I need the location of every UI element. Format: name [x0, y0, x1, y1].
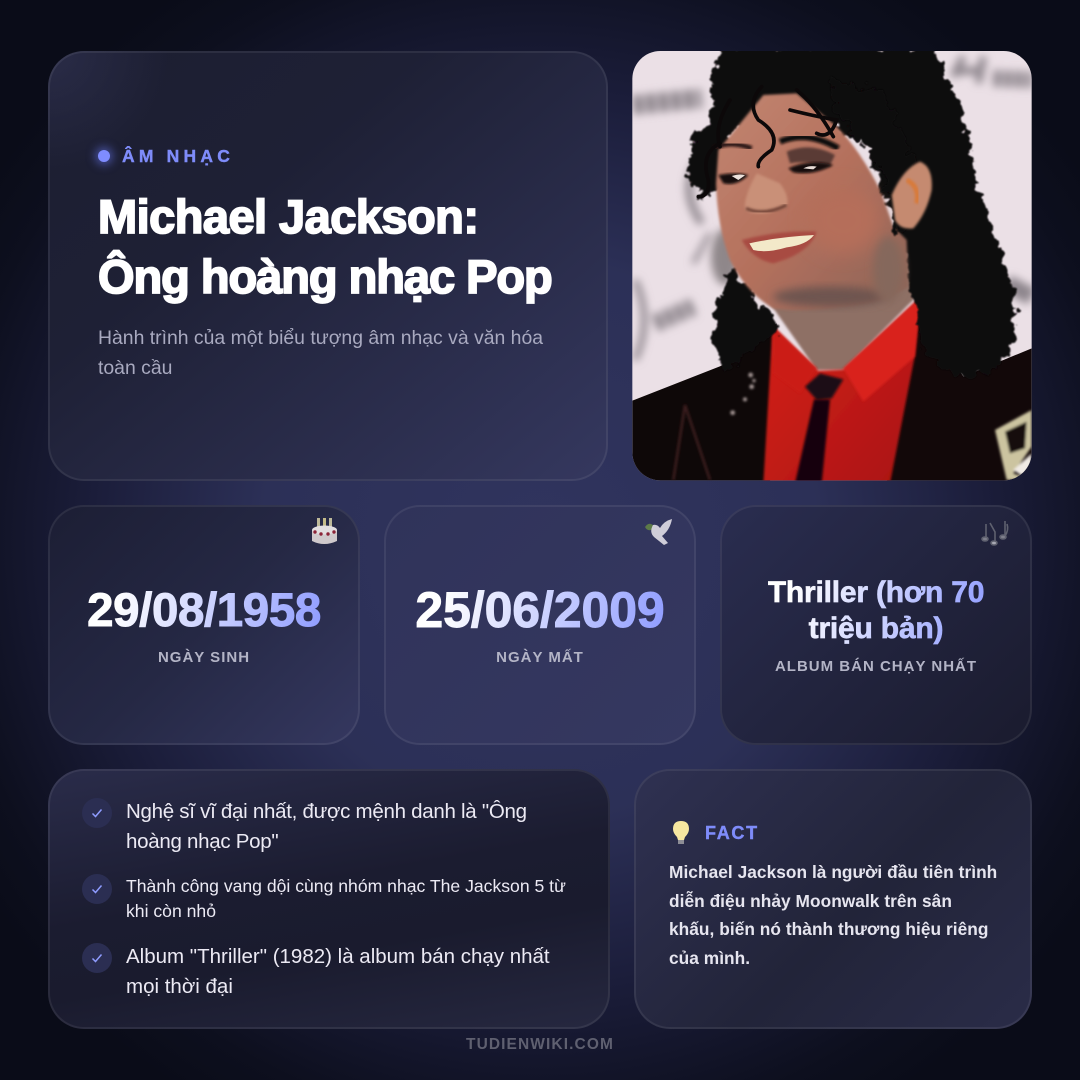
icon: birthday cake — [312, 518, 337, 544]
text: Album "Thriller" (1982) là album bán chạy nhất — [126, 945, 550, 968]
key point 3 — [82, 943, 550, 998]
stat: best-selling album: Thriller (hơn 70 — [768, 576, 984, 609]
icon: music notes — [981, 521, 1008, 546]
grey shadow near jaw — [711, 228, 739, 285]
stat: birth date: 29/08/1958 — [87, 584, 321, 637]
text: Nghệ sĩ vĩ đại nhất, được mệnh danh là "Ông — [126, 800, 527, 823]
fact text — [669, 862, 997, 968]
hair — [687, 47, 1015, 378]
stat: death date: 25/06/2009 — [415, 582, 665, 638]
text: khi còn nhỏ — [126, 901, 216, 921]
stat: best-selling album — [768, 576, 984, 645]
text — [126, 945, 550, 998]
text: mọi thời đại — [126, 975, 233, 998]
title: Michael Jackson: — [98, 190, 478, 243]
text: hoàng nhạc Pop" — [126, 830, 278, 853]
panel: death date card — [384, 505, 696, 745]
stat: best-selling album: triệu bản) — [809, 612, 943, 645]
fact text: của mình. — [669, 948, 750, 968]
fact heading: FACT — [705, 823, 759, 843]
panel: fact — [634, 769, 1032, 1029]
subtitle: Hành trình của một biểu tượng âm nhạc và văn hóa — [98, 327, 543, 349]
check icon — [82, 874, 112, 904]
curls — [698, 87, 837, 197]
category tag — [90, 142, 234, 170]
portrait photo — [632, 51, 1032, 480]
icon: dove — [645, 519, 672, 545]
watermark: TUDIENWIKI.COM — [466, 1036, 614, 1053]
check icon — [82, 798, 112, 828]
text — [126, 876, 566, 921]
check icon — [82, 943, 112, 973]
text — [126, 800, 527, 853]
label: birth date: NGÀY SINH — [158, 649, 250, 666]
panel: key points — [48, 769, 610, 1029]
key point 2 — [82, 874, 566, 921]
title — [98, 190, 552, 304]
label: album: ALBUM BÁN CHẠY NHẤT — [775, 658, 977, 675]
subtitle — [98, 327, 544, 379]
neck — [770, 252, 914, 371]
label: death date: NGÀY MẤT — [496, 649, 584, 666]
nose — [745, 173, 788, 213]
fact text: Michael Jackson là người đầu tiên trình — [669, 862, 997, 882]
fact text: diễn điệu nhảy Moonwalk trên sân — [669, 890, 952, 910]
glowing dot — [98, 150, 110, 162]
panel: album card — [720, 505, 1032, 745]
award trophy edge — [673, 405, 710, 480]
subtitle: toàn cầu — [98, 357, 172, 379]
face — [716, 93, 908, 310]
award on right — [995, 410, 1032, 480]
icon: light bulb — [673, 821, 689, 844]
title: Ông hoàng nhạc Pop — [98, 250, 552, 303]
ear — [892, 162, 932, 229]
jacket — [632, 323, 777, 483]
category label: ÂM NHẠC — [122, 146, 234, 166]
jacket sparkles — [730, 373, 756, 415]
fact text: khấu, biến nó thành thương hiệu riêng — [669, 919, 988, 939]
panel: birth date card — [48, 505, 360, 745]
hair over temple — [832, 82, 902, 237]
shirt — [763, 297, 921, 483]
eyes and brows — [713, 144, 752, 148]
key point 1 — [82, 798, 527, 853]
panel: header card — [48, 51, 608, 481]
mouth — [742, 231, 817, 263]
tie — [805, 373, 843, 400]
text: Thành công vang dội cùng nhóm nhạc The Jackson 5 từ — [126, 876, 566, 896]
backdrop logos — [633, 57, 1032, 360]
